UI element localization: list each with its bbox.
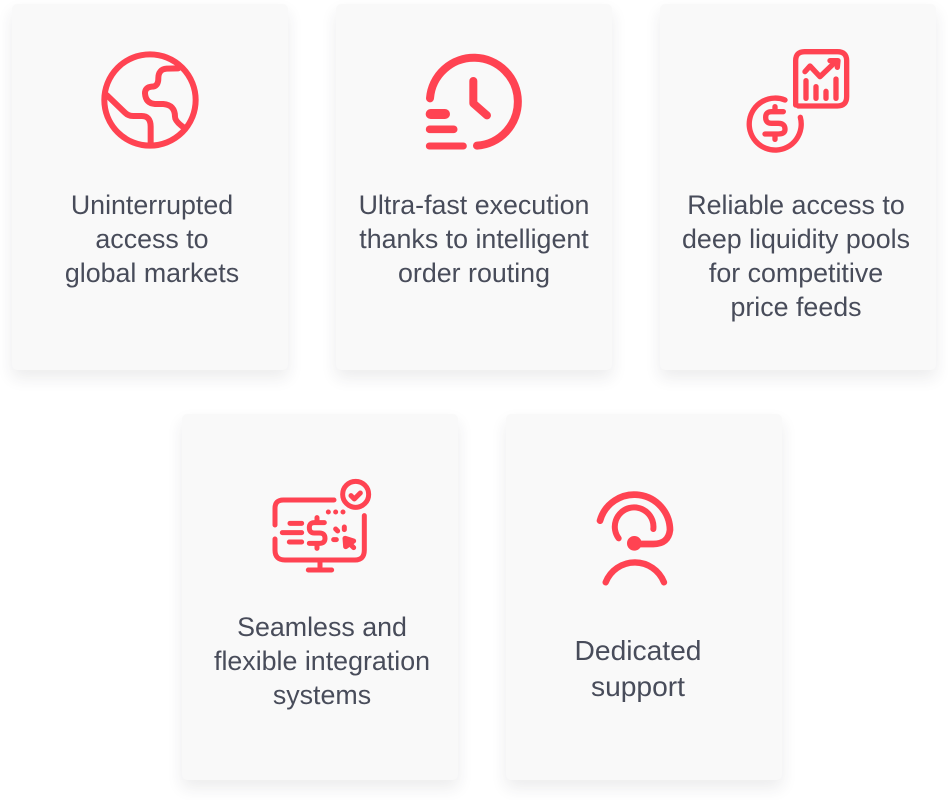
text: liquidity: Reliable access to [687,190,905,220]
text: liquidity [682,190,910,322]
text: global markets [65,190,239,288]
panel: liquidity [660,4,936,370]
text: global markets: Uninterrupted [71,190,233,220]
text: execution: thanks to intelligent [359,224,589,254]
text: liquidity: for competitive [709,258,883,288]
text: global markets: access to [95,224,209,254]
text: execution: Ultra-fast execution [359,190,589,220]
text: support: Dedicated [575,634,701,666]
text: global markets: global markets [65,258,239,288]
text: liquidity: price feeds [730,292,862,322]
text: execution [359,190,589,288]
text: execution: order routing [398,258,550,288]
panel: execution [336,4,612,370]
text: support [575,634,701,702]
icon: clock [429,58,518,146]
text: integration: flexible integration [214,646,430,676]
icon: globe [104,54,196,146]
icon: coin and chart [749,52,847,150]
text: integration: systems [273,680,371,710]
text: integration [214,612,430,710]
icon: monitor [275,481,369,570]
panel: support [506,414,782,780]
text: integration: Seamless and [237,612,407,642]
text: liquidity: deep liquidity pools [682,224,910,254]
panel: global markets [12,4,288,370]
panel: integration [182,414,458,780]
icon: headset support [600,495,670,582]
text: support: support [591,670,685,702]
